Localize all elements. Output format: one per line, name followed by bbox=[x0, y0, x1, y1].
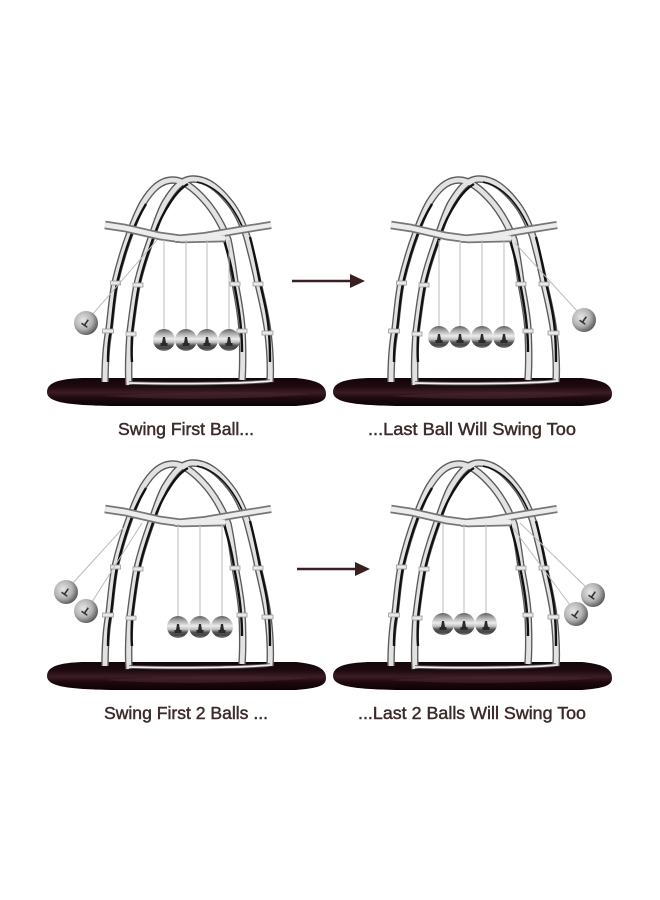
panel: swing first two balls bbox=[47, 463, 326, 723]
caption: ...Last Ball Will Swing Too bbox=[368, 419, 576, 439]
panel: swing first ball bbox=[47, 179, 326, 439]
hanging balls and strings bbox=[428, 240, 596, 348]
hanging balls and strings bbox=[74, 240, 240, 351]
cradle frame and base bbox=[333, 463, 612, 690]
cradle frame and base bbox=[47, 463, 326, 690]
arrow: first row bbox=[292, 274, 365, 288]
arrow: second row bbox=[297, 562, 370, 576]
cradle frame and base bbox=[333, 179, 612, 406]
caption: Swing First 2 Balls ... bbox=[104, 703, 268, 723]
hanging balls and strings bbox=[432, 523, 605, 635]
panel: last two balls swing bbox=[333, 463, 612, 723]
hanging balls and strings bbox=[54, 523, 233, 638]
panel: last ball swings bbox=[333, 179, 612, 439]
cradle frame and base bbox=[47, 179, 326, 406]
caption: Swing First Ball... bbox=[118, 419, 254, 439]
caption: ...Last 2 Balls Will Swing Too bbox=[358, 703, 586, 723]
